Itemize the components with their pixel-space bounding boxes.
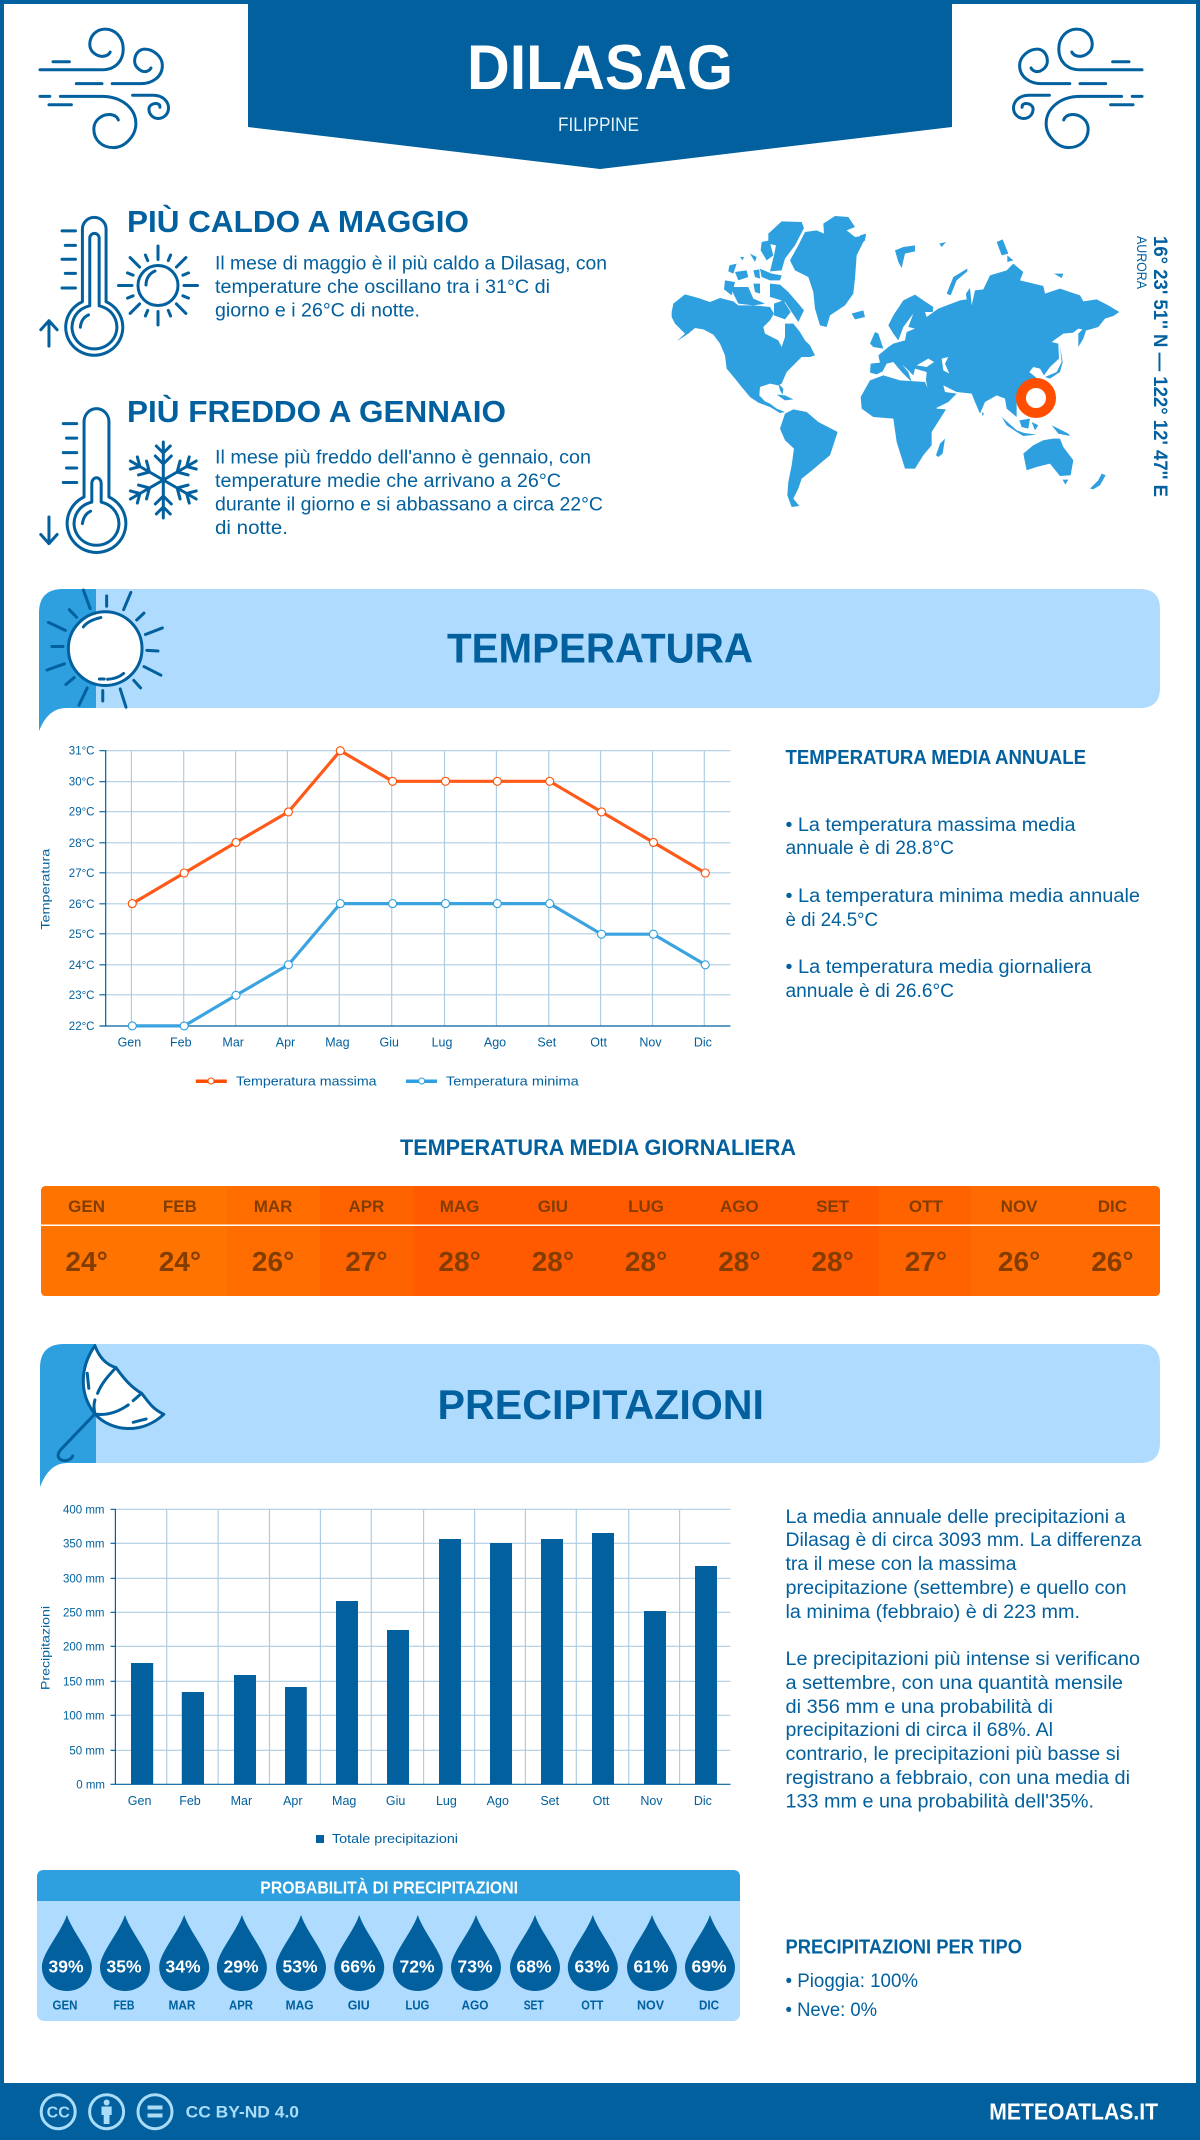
drop months: MAR <box>168 1997 196 2012</box>
x axis labels: Giu <box>379 1036 399 1050</box>
y axis labels: 25°C <box>69 929 94 941</box>
y axis labels: 24°C <box>69 960 94 972</box>
y axis labels: 26°C <box>69 899 94 911</box>
icon: wind right <box>1013 29 1142 148</box>
x axis labels: Apr <box>283 1794 303 1808</box>
brand: METEOATLAS.IT <box>989 2099 1159 2125</box>
y axis labels: 400 mm <box>63 1504 104 1516</box>
marker: location <box>1021 383 1051 413</box>
text: warmest month: Il mese di maggio è il più caldo a Dilasag, con <box>215 254 607 274</box>
x axis labels <box>118 1036 712 1050</box>
text: coldest month: durante il giorno e si abbassano a circa 22°C <box>215 494 603 516</box>
values: 26° <box>252 1246 294 1277</box>
month labels <box>68 1197 1127 1216</box>
drop months: LUG <box>405 1997 429 2012</box>
drop months: DIC <box>699 1997 720 2012</box>
panel: precipitation probability <box>37 1870 740 2021</box>
x axis labels: Dic <box>694 1794 712 1808</box>
precipitation description: registrano a febbraio, con una media di <box>786 1768 1130 1789</box>
month labels: AGO <box>720 1197 759 1216</box>
values: 26° <box>1091 1246 1134 1277</box>
drop percentages: 53% <box>282 1957 318 1977</box>
x axis labels: Nov <box>639 1036 662 1050</box>
drops <box>42 1915 735 1991</box>
x axis labels: Lug <box>432 1036 452 1050</box>
license: CC BY-ND 4.0 <box>186 2104 299 2122</box>
precipitation description: precipitazione (settembre) e quello con <box>786 1578 1126 1599</box>
drop percentages: 39% <box>48 1957 84 1977</box>
drop months: NOV <box>637 1997 664 2012</box>
x axis labels: Mag <box>332 1794 356 1808</box>
coordinates: 16° 23' 51'' N — 122° 12' 47'' E <box>1149 236 1170 497</box>
values: 26° <box>998 1246 1040 1277</box>
y axis labels: 150 mm <box>63 1676 104 1688</box>
x axis labels: Mar <box>222 1036 244 1050</box>
list: by type <box>786 1971 918 2021</box>
y axis labels: 100 mm <box>63 1710 104 1722</box>
bar chart: precipitation <box>38 1504 730 1846</box>
x axis labels: Set <box>537 1036 557 1050</box>
icon: cold thermometer <box>41 409 126 552</box>
banner: precipitation <box>40 1344 1160 1487</box>
list: annual temperature <box>786 815 1140 1002</box>
x axis labels: Feb <box>170 1036 192 1050</box>
icon: creative commons <box>41 2095 75 2129</box>
y axis labels: 29°C <box>69 807 94 819</box>
icon: attribution <box>90 2095 124 2129</box>
icon: no derivatives <box>138 2095 172 2129</box>
x axis labels: Feb <box>179 1794 201 1808</box>
y axis labels: 28°C <box>69 838 94 850</box>
table: daily mean temperature <box>41 1186 1160 1296</box>
y axis labels: 350 mm <box>63 1538 104 1550</box>
heading: warmest month: PIÙ CALDO A MAGGIO <box>127 203 469 239</box>
drop months: APR <box>229 1997 254 2012</box>
drop months: FEB <box>114 1997 134 2012</box>
legend: Temperatura minima <box>446 1074 580 1088</box>
drop percentages: 73% <box>457 1957 493 1977</box>
drop percentages: 34% <box>165 1957 201 1977</box>
drop percentages: 35% <box>106 1957 142 1977</box>
region label: AURORA <box>1134 236 1149 289</box>
drop percentages <box>48 1957 727 1977</box>
drop percentages: 61% <box>633 1957 669 1977</box>
values: 24° <box>65 1246 108 1277</box>
subtitle: FILIPPINE <box>558 114 639 136</box>
list: by type: • Neve: 0% <box>786 2000 877 2021</box>
text: coldest month <box>215 448 603 539</box>
list: annual temperature: annuale è di 26.6°C <box>786 981 954 1002</box>
y axis labels <box>63 1504 105 1791</box>
precipitation description: a settembre, con una quantità mensile <box>786 1673 1123 1694</box>
y axis labels: 200 mm <box>63 1641 104 1653</box>
text: coldest month: temperature medie che arrivano a 26°C <box>215 471 561 492</box>
y axis labels: 23°C <box>69 990 94 1002</box>
series: maximum temperature <box>128 747 709 908</box>
bars <box>131 1533 717 1784</box>
heading: temperature: TEMPERATURA <box>447 624 753 672</box>
x axis labels: Mag <box>325 1036 350 1050</box>
x axis labels: Mar <box>231 1794 252 1808</box>
drop percentages: 29% <box>223 1957 259 1977</box>
x axis labels: Ott <box>590 1036 607 1050</box>
y axis labels: 300 mm <box>63 1573 104 1585</box>
world map <box>672 216 1119 507</box>
precipitation description: di 356 mm e una probabilità di <box>786 1697 1053 1718</box>
text: warmest month: giorno e i 26°C di notte. <box>215 300 420 322</box>
values: 28° <box>811 1246 854 1277</box>
precipitation description: contrario, le precipitazioni più basse si <box>786 1744 1120 1765</box>
icon: sun <box>47 590 162 707</box>
month labels: MAG <box>440 1197 479 1216</box>
precipitation description <box>786 1507 1142 1812</box>
x axis labels: Ott <box>593 1794 610 1808</box>
precipitation description: La media annuale delle precipitazioni a <box>786 1507 1126 1528</box>
icon: umbrella <box>58 1346 164 1461</box>
y axis labels: 31°C <box>69 746 94 758</box>
values: 28° <box>532 1246 574 1277</box>
heading: by type: PRECIPITAZIONI PER TIPO <box>786 1936 1022 1958</box>
y axis labels: 30°C <box>69 777 94 789</box>
values: 28° <box>718 1246 761 1277</box>
heading: probability: PROBABILITÀ DI PRECIPITAZIONI <box>260 1876 518 1897</box>
month labels: GEN <box>68 1197 105 1216</box>
month labels: SET <box>816 1197 850 1216</box>
x axis labels: Apr <box>276 1036 295 1050</box>
series: minimum temperature <box>128 900 709 1030</box>
x axis labels: Giu <box>386 1794 405 1808</box>
values: 27° <box>345 1246 388 1277</box>
legend: Temperatura massima <box>236 1074 377 1088</box>
month labels: OTT <box>909 1197 944 1216</box>
month labels: DIC <box>1098 1197 1127 1216</box>
x axis labels: Ago <box>484 1036 506 1050</box>
month labels: MAR <box>254 1197 292 1216</box>
month labels: GIU <box>538 1197 568 1216</box>
list: annual temperature: • La temperatura media giornaliera <box>786 957 1092 978</box>
list: annual temperature: annuale è di 28.8°C <box>786 838 954 859</box>
drop months: OTT <box>581 1997 603 2012</box>
drop percentages: 63% <box>574 1957 610 1977</box>
heading: coldest month: PIÙ FREDDO A GENNAIO <box>127 393 506 429</box>
month labels: LUG <box>628 1197 664 1216</box>
x axis labels <box>128 1794 712 1808</box>
values: 28° <box>438 1246 481 1277</box>
drop months <box>52 1997 720 2012</box>
x axis labels: Nov <box>640 1794 663 1808</box>
heading: annual temperature: TEMPERATURA MEDIA ANNUALE <box>786 747 1086 769</box>
values: 28° <box>625 1246 667 1277</box>
precipitation description: Dilasag è di circa 3093 mm. La differenza <box>786 1530 1142 1551</box>
annual temperature text <box>786 747 1140 1002</box>
precipitation by type <box>786 1936 1022 2021</box>
text: warmest month <box>215 254 607 322</box>
x axis labels: Gen <box>118 1036 141 1050</box>
precipitation description: Le precipitazioni più intense si verificano <box>786 1649 1140 1670</box>
y axis labels: 50 mm <box>69 1745 104 1757</box>
month labels: APR <box>348 1197 384 1216</box>
x axis labels: Lug <box>436 1794 457 1808</box>
list: by type: • Pioggia: 100% <box>786 1971 918 1992</box>
precipitation description: la minima (febbraio) è di 223 mm. <box>786 1602 1080 1623</box>
drop months: SET <box>524 1997 544 2012</box>
legend: Totale precipitazioni <box>332 1831 458 1846</box>
list: annual temperature: è di 24.5°C <box>786 910 878 931</box>
header banner <box>248 0 952 169</box>
drop months: GIU <box>348 1997 370 2012</box>
precipitation description: tra il mese con la massima <box>786 1554 1017 1575</box>
x axis labels: Set <box>540 1794 560 1808</box>
values: 27° <box>905 1246 947 1277</box>
text: warmest month: temperature che oscillano tra i 31°C di <box>215 277 550 298</box>
icon: sun small <box>118 246 198 325</box>
line chart: temperature <box>38 746 730 1088</box>
icon: creative commons: CC <box>47 2104 70 2122</box>
drop percentages: 72% <box>399 1957 435 1977</box>
list: annual temperature: • La temperatura massima media <box>786 815 1076 836</box>
text: coldest month: Il mese più freddo dell'anno è gennaio, con <box>215 448 591 468</box>
icon: wind left <box>40 29 169 148</box>
y axis labels <box>69 746 94 1033</box>
month labels: NOV <box>1001 1197 1038 1216</box>
precipitation description: 133 mm e una probabilità dell'35%. <box>786 1792 1094 1812</box>
y axis labels: 250 mm <box>63 1607 104 1619</box>
icon: hot thermometer <box>41 217 123 355</box>
values <box>65 1246 1134 1277</box>
text: coldest month: di notte. <box>215 518 288 539</box>
drop months: MAG <box>286 1997 314 2012</box>
y axis title: Temperatura <box>38 848 52 930</box>
x axis labels: Dic <box>694 1036 712 1050</box>
y axis title: Precipitazioni <box>38 1606 52 1690</box>
legend <box>196 1074 580 1088</box>
drop months: GEN <box>52 1997 78 2012</box>
heading: daily mean temperature: TEMPERATURA MEDIA GIORNALIERA <box>400 1135 796 1160</box>
list: annual temperature: • La temperatura minima media annuale <box>786 886 1140 907</box>
drop percentages: 66% <box>340 1957 376 1977</box>
values: 24° <box>159 1246 201 1277</box>
title: DILASAG <box>467 33 733 103</box>
x axis labels: Gen <box>128 1794 151 1808</box>
x axis labels: Ago <box>487 1794 509 1808</box>
y axis labels: 0 mm <box>76 1779 105 1791</box>
footer <box>0 2083 1200 2140</box>
icon: snowflake <box>126 442 200 518</box>
month labels: FEB <box>163 1197 197 1216</box>
heading: precipitation: PRECIPITAZIONI <box>438 1381 764 1428</box>
banner: temperature <box>39 589 1160 731</box>
y axis labels: 22°C <box>69 1021 94 1033</box>
precipitation description: precipitazioni di circa il 68%. Al <box>786 1720 1053 1741</box>
drop percentages: 68% <box>516 1957 552 1977</box>
y axis labels: 27°C <box>69 868 94 880</box>
drop percentages: 69% <box>691 1957 727 1977</box>
drop months: AGO <box>462 1997 488 2012</box>
